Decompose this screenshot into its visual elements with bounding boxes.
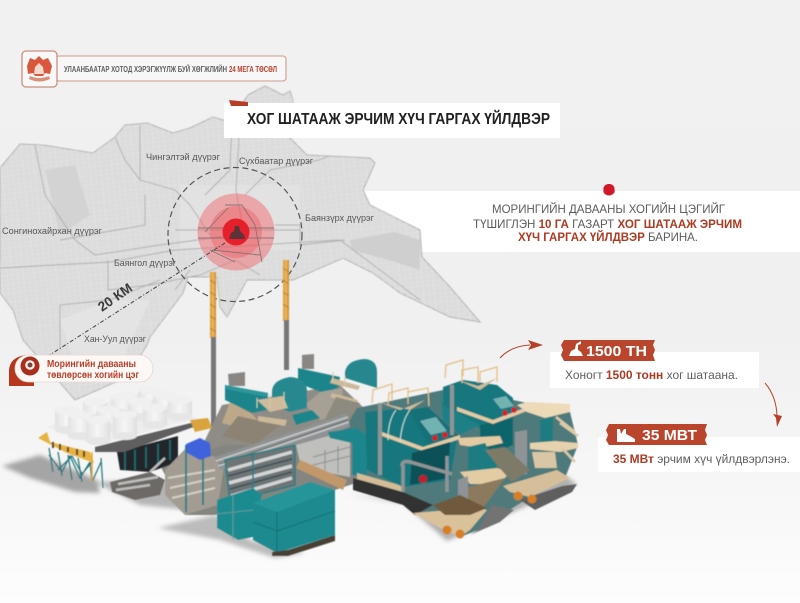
description text block (473, 184, 742, 244)
header badge: 24 mega projects (22, 51, 286, 87)
chimneys (210, 260, 289, 427)
header badge: 24 mega projects: УЛААНБААТАР ХОТОД ХЭРЭГЖҮҮЛЖ БУЙ ХӨГЖЛИЙН (64, 63, 227, 74)
map labels: district names: Баянзүрх дүүрэг (305, 213, 374, 224)
map labels: district names: Сүхбаатар дүүрэг (239, 156, 313, 167)
boiler line two (413, 360, 578, 538)
map labels: district names: Сонгинохайрхан дүүрэг (2, 226, 103, 237)
central pipe rack (110, 413, 367, 515)
distance line: 20 KM (45, 243, 225, 358)
icon: location pin (20, 356, 40, 376)
rear teal units (222, 354, 377, 445)
description text block: ХҮЧ ГАРГАХ ҮЙЛДВЭР БАРИНА. (518, 229, 698, 244)
callout: collection point location tag: төвлөрсөн хогийн цэг (47, 370, 139, 381)
panel: white band behind description (365, 191, 800, 252)
title panel: ХОГ ШАТААЖ ЭРЧИМ ХҮЧ ГАРГАХ ҮЙЛДВЭР (247, 110, 550, 128)
map of Ulaanbaatar districts (0, 85, 482, 401)
map labels: district names: Баянгол дүүрэг (114, 258, 176, 269)
title panel (224, 100, 560, 138)
description text block: ТҮШИГЛЭН 10 ГА ГАЗАРТ ХОГ ШАТААЖ ЭРЧИМ (473, 217, 742, 231)
icon: Ulaanbaatar coat of arms (22, 51, 57, 87)
white storage tanks (55, 386, 192, 445)
callout: collection point location tag (9, 355, 153, 386)
stat panel: 1500 tons: Хоногт 1500 тонн хог шатаана. (565, 368, 738, 382)
blue tank (186, 438, 211, 460)
teal generator containers (217, 482, 335, 556)
stat panel: 1500 tons (550, 340, 759, 388)
stat panel: 35 MW: 35 МВТ (642, 427, 697, 444)
stat panel: 35 MW (598, 424, 800, 472)
map labels: district names (2, 152, 374, 345)
plant illustration (2, 260, 578, 558)
ground shadows (2, 455, 577, 558)
map labels: district names: Чингэлтэй дүүрэг (146, 152, 221, 163)
tank platform and legs (38, 392, 212, 488)
distance line: 20 KM: 20 КМ (95, 280, 135, 314)
icon: red flower pin (603, 184, 615, 196)
arrow: to 1500 ton stat (500, 340, 543, 358)
stat panel: 1500 tons: 1500 ТН (586, 343, 647, 360)
callout: collection point location tag: Морингийн давааны (47, 359, 136, 370)
map radius: dashed circle and red target (168, 168, 302, 302)
boiler line one (353, 384, 460, 515)
icon: excavator (569, 341, 583, 356)
icon: power plant (617, 429, 635, 442)
description text block: МОРИНГИЙН ДАВААНЫ ХОГИЙН ЦЭГИЙГ (492, 201, 725, 216)
header badge: 24 mega projects: 24 МЕГА ТӨСӨЛ (229, 64, 277, 74)
map labels: district names: Хан-Уул дүүрэг (84, 334, 146, 345)
arrow: to 35 MW stat (765, 383, 782, 427)
plant silhouettes filling gaps (160, 385, 578, 537)
stat panel: 35 MW: 35 МВт эрчим хүч үйлдвэрлэнэ. (613, 452, 790, 466)
